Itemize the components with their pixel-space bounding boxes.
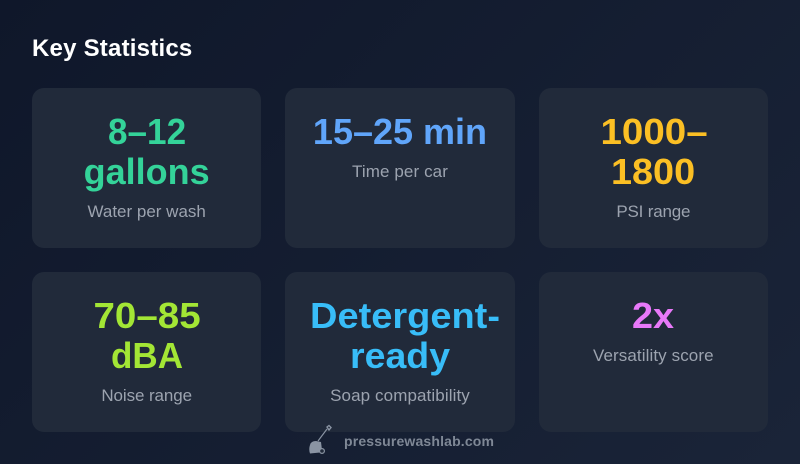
value: 2x: 2x	[632, 295, 674, 336]
value: dBA: dBA	[111, 335, 183, 376]
icon: pressure washer	[309, 424, 332, 454]
value: minutes: 15–25 min	[313, 111, 487, 152]
value: PSI: 1800	[611, 151, 695, 192]
value: dBA	[93, 295, 200, 376]
label: versatility score: Versatility score	[593, 346, 714, 365]
footer brand text: pressurewashlab.com	[344, 433, 494, 449]
value: gallons: gallons	[84, 151, 210, 192]
panel: noise range	[32, 272, 261, 432]
panel: PSI range	[539, 88, 768, 248]
title: Key Statistics	[32, 35, 192, 62]
value: detergent-ready	[310, 295, 500, 376]
label: noise range: Noise range	[101, 386, 192, 405]
panel: water per wash	[32, 88, 261, 248]
label: time per car: Time per car	[352, 162, 448, 181]
label: soap compatibility: Soap compatibility	[330, 386, 470, 405]
label: PSI range: PSI range	[616, 202, 690, 221]
value: dBA: 70–85	[93, 295, 200, 336]
value: gallons: 8–12	[108, 111, 186, 152]
label: water per wash: Water per wash	[87, 202, 206, 221]
value: gallons	[84, 111, 210, 192]
value: PSI: 1000–	[601, 111, 708, 152]
value: detergent-ready: ready	[350, 335, 450, 376]
value: detergent-ready: Detergent-	[310, 295, 500, 336]
panel: time per car	[285, 88, 515, 248]
panel: versatility score	[539, 272, 768, 432]
value: PSI	[601, 111, 708, 192]
panel: soap compatibility	[285, 272, 515, 432]
